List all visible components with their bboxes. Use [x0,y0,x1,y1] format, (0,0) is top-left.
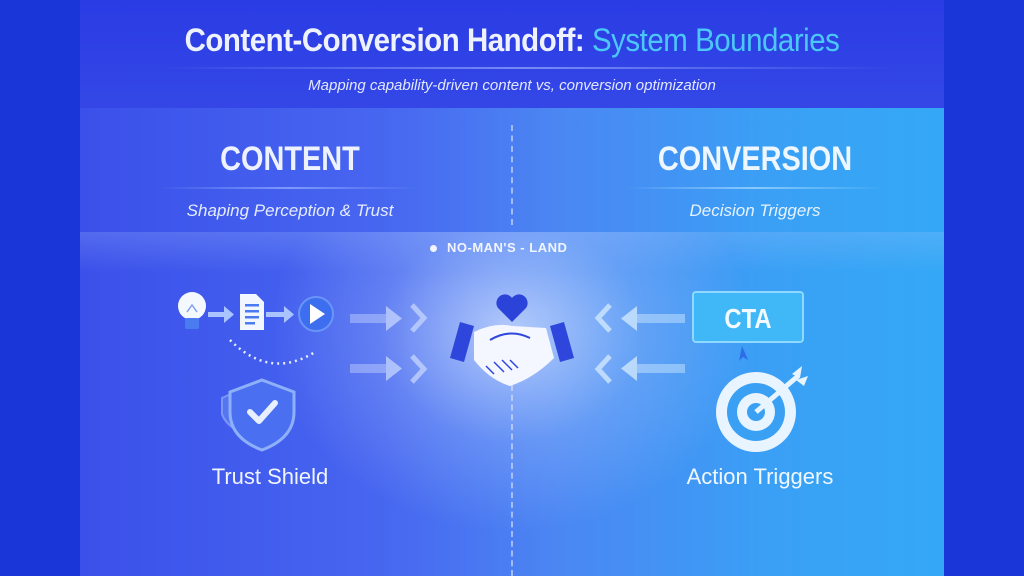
icon: target [716,366,808,452]
arrow: small [208,306,234,323]
no-man's-land label: NO-MAN'S - LAND [447,240,567,255]
no-man's-land glow band [80,232,944,576]
panel: conversion heading: CONVERSION [658,140,852,178]
center divider [511,125,513,225]
panel: conversion heading: Decision Triggers [689,201,820,220]
subtitle: Mapping capability-driven content vs, conversion optimization [308,77,716,94]
panel: conversion heading [640,140,872,220]
icon: heart [496,294,528,322]
label: trust shield: Trust Shield [212,464,328,489]
arrows: content to center [350,305,424,382]
icon: handshake [450,322,574,386]
panel: content heading [176,140,401,220]
header band [80,0,944,108]
icon: cursor [739,346,748,361]
icon: document [240,294,264,330]
main panel [80,108,944,576]
arrow: small 2 [266,306,294,323]
arrow: dotted loop [230,340,315,364]
icon: CTA button: CTA [724,302,772,334]
icon: trust shield [222,380,294,450]
panel: content heading: CONTENT [220,140,360,178]
icon: play button [299,297,333,331]
arrows: conversion to center [598,305,685,382]
panel: content heading: Shaping Perception & Trust [187,201,393,220]
title: Content-Conversion Handoff: System Boundaries [185,22,839,58]
icon: lightbulb [178,292,206,329]
label: action triggers: Action Triggers [687,464,833,489]
icon: CTA button [693,292,803,342]
